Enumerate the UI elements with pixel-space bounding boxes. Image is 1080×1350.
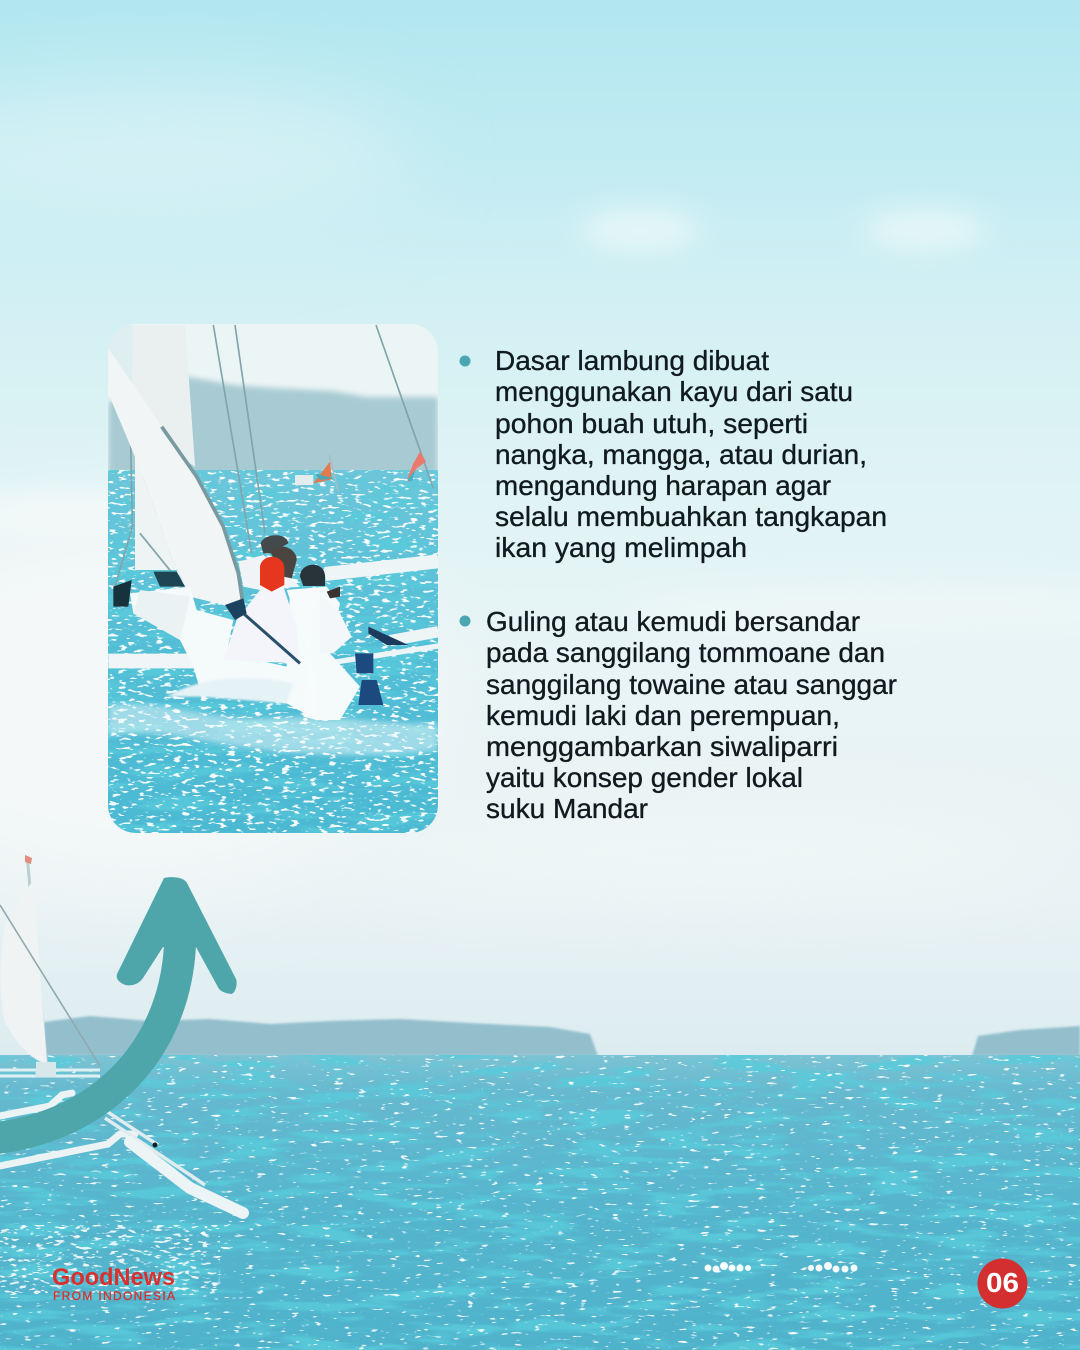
photo detail: flags xyxy=(295,452,426,492)
background: sky and clouds xyxy=(0,0,1080,1060)
text block: second bullet: menggambarkan siwaliparri xyxy=(486,731,838,762)
background: outrigger boom xyxy=(0,1093,243,1213)
text block: second bullet: sanggilang towaine atau sanggar xyxy=(486,669,897,700)
logo: GoodNews from Indonesia: GoodNews xyxy=(52,1264,175,1291)
page number badge xyxy=(978,1258,1028,1308)
text block: first bullet: selalu membuahkan tangkapan xyxy=(495,501,887,532)
photo detail: rigging lines xyxy=(115,325,433,587)
background: sea xyxy=(0,1055,1080,1350)
text block: first bullet: pohon buah utuh, seperti xyxy=(495,408,808,439)
background: distant islands xyxy=(44,1016,1080,1056)
text block: first bullet: ikan yang melimpah xyxy=(495,532,747,563)
text block: first bullet: mengandung harapan agar xyxy=(495,470,831,501)
text block: second bullet: pada sanggilang tommoane dan xyxy=(486,637,885,668)
background: distant sailboat xyxy=(0,855,100,1077)
text block: first bullet xyxy=(460,345,887,563)
text block: second bullet: Guling atau kemudi bersandar xyxy=(486,606,860,637)
photo detail: main sail xyxy=(108,348,245,607)
text block: second bullet: yaitu konsep gender lokal xyxy=(486,762,803,793)
photo: sailing boat crew xyxy=(108,324,438,833)
arrow pointing up to photo xyxy=(0,877,237,1139)
logo: GoodNews from Indonesia xyxy=(52,1264,175,1303)
page number badge: 06 xyxy=(986,1267,1019,1298)
text block: first bullet: Dasar lambung dibuat xyxy=(495,345,769,376)
photo detail: hull and outrigger xyxy=(108,561,438,720)
photo detail: crew xyxy=(223,535,408,705)
text block: second bullet xyxy=(460,606,897,824)
text block: first bullet: nangka, mangga, atau durian, xyxy=(495,439,867,470)
text block: second bullet: kemudi laki dan perempuan, xyxy=(486,700,840,731)
text block: second bullet: suku Mandar xyxy=(486,793,648,824)
text block: first bullet: menggunakan kayu dari satu xyxy=(495,376,853,407)
photo detail: rear sails xyxy=(108,325,195,597)
logo: GoodNews from Indonesia: FROM INDONESIA xyxy=(53,1289,175,1303)
